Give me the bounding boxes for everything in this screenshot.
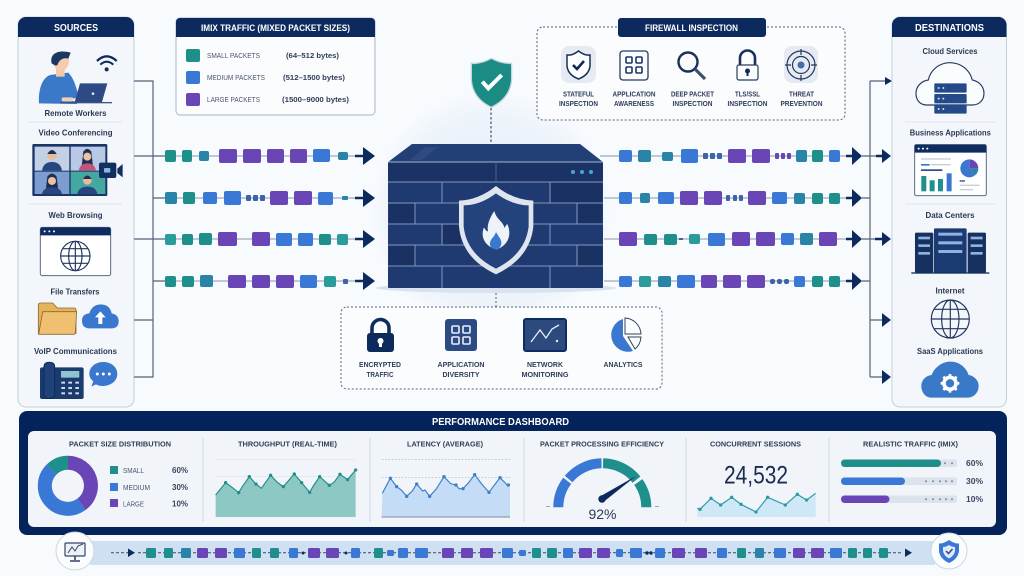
item: threat prevention: PREVENTION [780, 99, 822, 108]
connector bus: sources [134, 81, 165, 377]
gauge: packet processing efficiency [540, 440, 664, 522]
icon: shield with flame [459, 186, 533, 274]
widget: concurrent sessions: 24,532 [724, 462, 788, 490]
widget: packet size distribution: PACKET SIZE DISTRIBUTION [69, 440, 171, 448]
label: voip communications: VoIP Communications [34, 346, 117, 356]
chart: realistic traffic bars [841, 440, 983, 504]
widget: packet size distribution: MEDIUM [123, 483, 150, 492]
widget: packet size distribution: LARGE [123, 500, 144, 508]
item: encrypted traffic [359, 320, 402, 379]
item: stateful inspection: INSPECTION [559, 99, 598, 108]
item: stateful inspection: STATEFUL [563, 90, 594, 98]
legend row: small packets: SMALL PACKETS [207, 51, 260, 60]
item: threat prevention: THREAT [789, 90, 814, 98]
widget: concurrent sessions [697, 440, 816, 517]
packet stream: outbound row 3 [604, 230, 862, 248]
panel: sources [18, 17, 134, 407]
legend row: large packets: (1500–9000 bytes) [282, 95, 350, 104]
legend row: large packets: LARGE PACKETS [207, 95, 260, 104]
item: application diversity: DIVERSITY [442, 370, 480, 379]
legend row: large packets [186, 93, 350, 106]
label: web browsing: Web Browsing [48, 210, 102, 220]
icon: shield badge [931, 533, 967, 569]
icon: business dashboard [915, 145, 986, 196]
legend row: medium packets: MEDIUM PACKETS [207, 73, 265, 82]
item: application awareness: APPLICATION [612, 90, 656, 98]
packet stream: inbound row 4 [165, 272, 375, 290]
widget: packet size distribution: 10% [172, 500, 188, 508]
icon: desk phone and chat [40, 362, 117, 399]
panel: firewall inspection [537, 18, 845, 120]
chart: throughput [216, 440, 357, 517]
firewall appliance [376, 144, 616, 293]
label: video conferencing: Video Conferencing [38, 128, 112, 138]
icon: folder and cloud upload [38, 303, 119, 334]
chart: realistic traffic bars: REALISTIC TRAFFIC (IMIX) [863, 440, 958, 448]
item: encrypted traffic: ENCRYPTED [359, 360, 402, 369]
item: TLS/SSL inspection: INSPECTION [728, 99, 768, 108]
item: TLS/SSL inspection: TLS/SSL [735, 90, 760, 98]
icon: internet globe [931, 300, 969, 338]
icon: remote worker [39, 52, 117, 104]
widget: packet size distribution: 30% [172, 483, 188, 492]
item: network monitoring: NETWORK [527, 360, 564, 369]
heading: IMIX traffic: IMIX TRAFFIC (MIXED PACKET SIZES) [201, 23, 350, 34]
item: network monitoring [522, 319, 569, 379]
heading: destinations: DESTINATIONS [915, 23, 984, 34]
connector bus: destinations [862, 77, 892, 384]
item: deep packet inspection: DEEP PACKET [671, 90, 714, 98]
label: data centers: Data Centers [926, 210, 975, 220]
icon: web browser [40, 227, 111, 276]
label: remote workers: Remote Workers [44, 108, 107, 118]
label: file transfers: File Transfers [50, 286, 100, 296]
item: TLS/SSL inspection [728, 50, 768, 108]
chart: latency [382, 440, 510, 517]
item: encrypted traffic: TRAFFIC [366, 370, 394, 379]
heading: firewall inspection: FIREWALL INSPECTION [645, 23, 738, 34]
legend row: small packets: (64–512 bytes) [286, 51, 340, 60]
icon: saas cloud with gear [921, 362, 979, 398]
chart: realistic traffic bars: 60% [966, 459, 983, 468]
widget: packet size distribution [45, 440, 188, 509]
legend row: small packets [186, 49, 340, 62]
packet stream: outbound row 1 [600, 147, 862, 165]
item: application diversity: APPLICATION [438, 360, 484, 369]
item: network monitoring: MONITORING [522, 370, 569, 379]
icon: data center racks [911, 228, 989, 274]
panel: traffic characteristics [341, 307, 662, 389]
heading: performance dashboard: PERFORMANCE DASHBOARD [432, 416, 569, 428]
icon: cloud server [916, 63, 984, 114]
label: business applications: Business Applications [910, 128, 991, 138]
packet stream: inbound row 2 [165, 189, 375, 207]
icon: video conferencing [32, 144, 123, 196]
label: saas applications: SaaS Applications [917, 346, 983, 356]
chart: realistic traffic bars: 30% [966, 477, 983, 486]
icon: monitor badge [56, 532, 94, 570]
widget: concurrent sessions: CONCURRENT SESSIONS [710, 440, 801, 448]
packet flow band [90, 541, 935, 565]
widget: packet size distribution: 60% [172, 466, 188, 475]
chart: latency: LATENCY (AVERAGE) [407, 440, 483, 448]
item: analytics: ANALYTICS [604, 360, 642, 369]
item: threat prevention [780, 46, 822, 108]
panel: IMIX traffic legend [176, 18, 375, 115]
item: application awareness: AWARENESS [614, 99, 654, 108]
chart: throughput: THROUGHPUT (REAL-TIME) [238, 440, 337, 448]
item: application awareness [612, 51, 656, 108]
widget: packet size distribution: SMALL [123, 466, 144, 475]
chart: realistic traffic bars: 10% [966, 495, 983, 504]
packet stream: inbound row 3 [165, 230, 375, 248]
item: deep packet inspection: INSPECTION [672, 99, 712, 108]
gauge: packet processing efficiency: 92% [588, 506, 617, 522]
item: application diversity [438, 319, 484, 379]
gauge: packet processing efficiency: PACKET PROCESSING EFFICIENCY [540, 440, 664, 448]
label: internet: Internet [936, 286, 965, 296]
packet stream: outbound row 2 [604, 189, 862, 207]
label: cloud services: Cloud Services [922, 46, 978, 56]
item: analytics [604, 318, 642, 369]
item: deep packet inspection [671, 52, 714, 108]
panel: destinations [892, 17, 1006, 407]
packet stream: inbound row 1 [165, 147, 375, 165]
legend row: medium packets: (512–1500 bytes) [283, 73, 346, 82]
packet stream: outbound row 4 [604, 272, 862, 290]
item: stateful inspection [559, 46, 598, 108]
heading: sources: SOURCES [54, 23, 98, 34]
legend row: medium packets [186, 71, 346, 84]
panel: performance dashboard [19, 411, 1007, 535]
icon: check shield [471, 58, 512, 107]
